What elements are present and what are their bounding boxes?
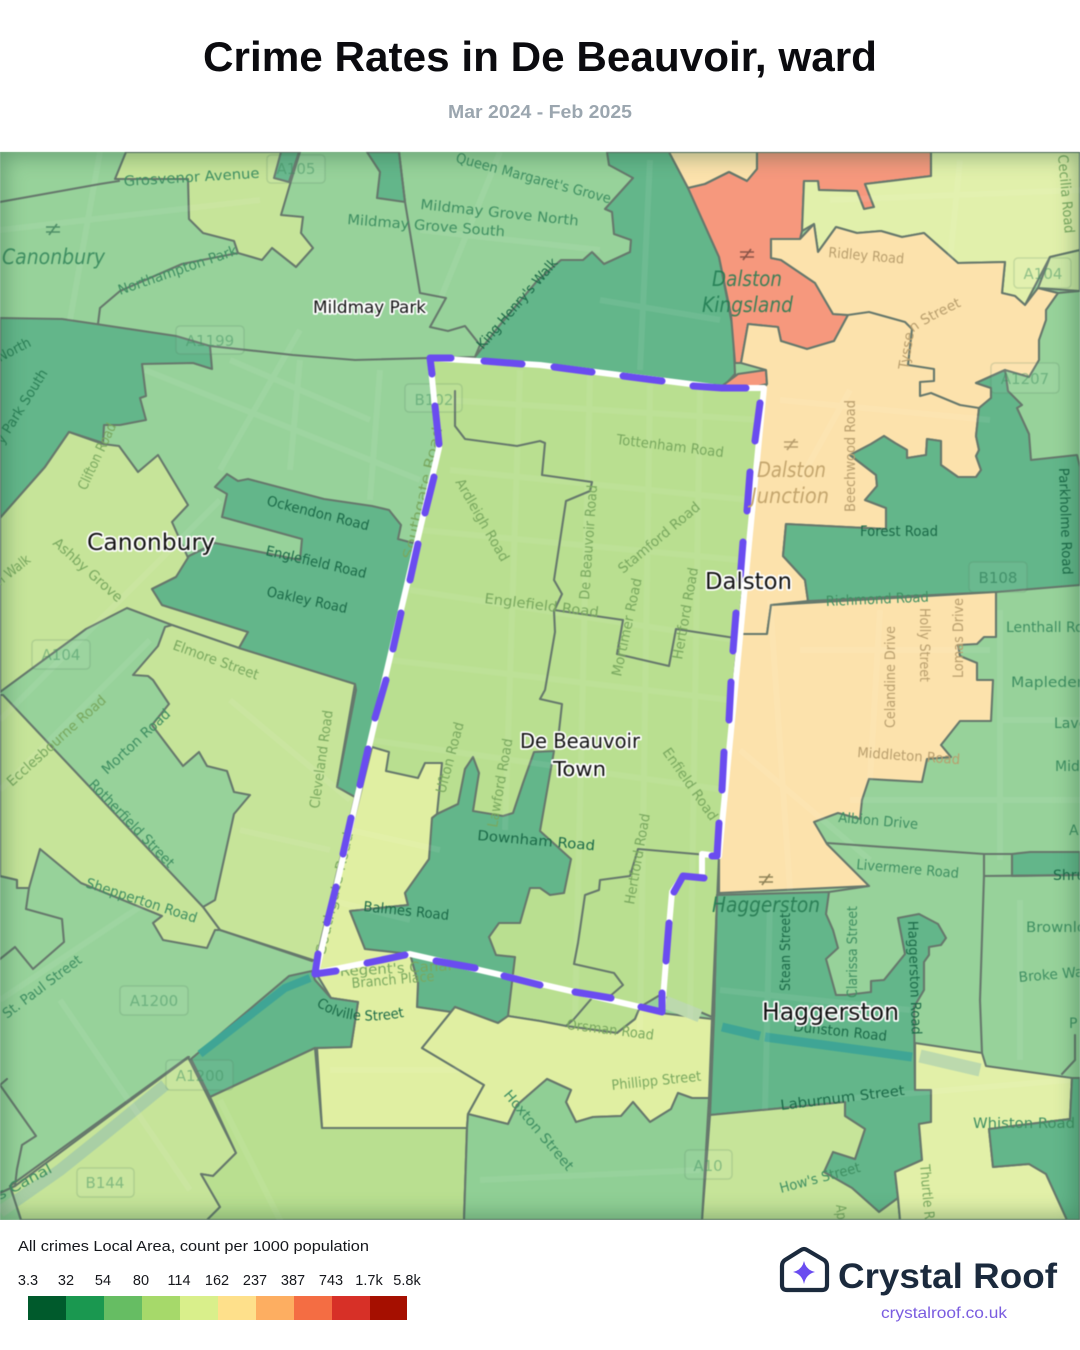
street labels: Oakley Road xyxy=(265,584,349,617)
legend values: 387 xyxy=(281,1273,305,1289)
area: south park xyxy=(201,1048,467,1220)
station labels (italic): Kingsland xyxy=(702,293,794,317)
street labels: Clifton Road xyxy=(75,421,120,493)
place name labels: Mildmay Park xyxy=(313,298,426,318)
street labels: How's Street xyxy=(778,1160,863,1197)
ward boundary: De Beauvoir xyxy=(315,358,764,1012)
area: Grosvenor Avenue xyxy=(115,152,313,267)
station labels (italic) xyxy=(2,245,829,917)
legend xyxy=(18,1239,421,1320)
road shields xyxy=(32,155,1071,1197)
street labels: Grosvenor Avenue xyxy=(123,166,260,190)
area: Shepperton xyxy=(0,695,220,948)
street labels: Elmore Street xyxy=(171,638,261,684)
area: Elmore Street xyxy=(133,625,355,961)
street labels: Beechwood Road xyxy=(843,400,859,512)
area: Colville dark xyxy=(191,971,358,1097)
area: Regent's Canal stripe xyxy=(722,1027,912,1057)
street labels: Hoxton Street xyxy=(500,1087,577,1175)
legend colour scale xyxy=(28,1296,407,1320)
street labels: Orsman Road xyxy=(566,1017,655,1044)
street labels: Stamford Road xyxy=(615,499,704,577)
area: King Henry dark xyxy=(430,152,735,388)
street labels: Clarissa Street xyxy=(845,906,861,998)
street labels: Livermere Road xyxy=(856,857,960,882)
area: ward south-west pale xyxy=(316,747,442,973)
legend values: 1.7k xyxy=(355,1273,383,1289)
area: Haggerston dark xyxy=(710,892,946,1212)
place name labels: De Beauvoir xyxy=(520,729,641,753)
area: canal strip xyxy=(200,978,310,1054)
area: Dalston Junction orange xyxy=(738,224,1058,634)
street labels: Richmond Road xyxy=(825,590,929,610)
station labels (italic): Canonbury xyxy=(2,245,106,269)
area: Ockendon dark xyxy=(152,474,420,797)
street labels: Morton Road xyxy=(99,706,174,778)
street labels xyxy=(0,152,1080,1220)
place name labels xyxy=(87,298,899,1026)
street labels: Regent's Canal xyxy=(339,958,452,980)
place name labels: Town xyxy=(552,757,606,781)
choropleth map xyxy=(0,151,1080,1220)
street labels: Enfield Road xyxy=(659,745,721,824)
legend values: 114 xyxy=(167,1273,191,1289)
street labels: Lawford Road xyxy=(485,737,517,829)
road shields: A1200 xyxy=(130,992,178,1010)
road shields: A10 xyxy=(693,1157,723,1175)
road shields: A1207 xyxy=(1001,370,1049,388)
area: small salmon xyxy=(722,370,767,388)
legend values xyxy=(18,1273,421,1289)
street labels: Hertford Road xyxy=(622,812,654,906)
road shields: A105 xyxy=(277,160,315,178)
street labels: Downham Road xyxy=(477,828,596,854)
street labels: Ardleigh Road xyxy=(452,476,512,565)
legend values: 5.8k xyxy=(393,1273,421,1289)
street labels: Balmes Road xyxy=(363,899,450,924)
area: Middleton orange xyxy=(719,592,996,893)
road shields: B144 xyxy=(86,1174,124,1192)
street labels: King Henry's Walk xyxy=(474,255,562,353)
street labels: Lomas Drive xyxy=(951,598,967,678)
header xyxy=(203,33,877,122)
street labels: A xyxy=(1069,823,1079,839)
road shields: A104 xyxy=(1024,265,1062,283)
street labels: Cecilia Road xyxy=(1054,154,1077,234)
footer xyxy=(0,1220,1080,1350)
station labels (italic): Junction xyxy=(747,484,829,508)
place name labels: Canonbury xyxy=(87,530,215,556)
street labels: Hertford Road xyxy=(670,566,702,661)
website: crystalroof.co.uk xyxy=(881,1305,1008,1322)
legend values: 162 xyxy=(205,1273,229,1289)
street labels: Middleton Road xyxy=(857,745,961,768)
wordmark: Crystal Roof xyxy=(838,1257,1057,1296)
extra boundary lines xyxy=(0,152,1080,1220)
road shields: B108 xyxy=(979,569,1017,587)
place name labels: Haggerston xyxy=(762,998,899,1026)
street labels: Dunston Road xyxy=(793,1019,888,1045)
area: Forest Road dark xyxy=(783,370,1080,601)
street labels: Branch Place xyxy=(351,969,435,992)
street labels: Ecclesbourne Road xyxy=(4,692,110,790)
street labels: Holly Street xyxy=(916,608,932,682)
street labels: Northampton Park xyxy=(116,243,240,299)
street labels: Southgate Road xyxy=(400,426,446,561)
area: A105 dark xyxy=(274,152,299,182)
subtitle: period: Mar 2024 - Feb 2025 xyxy=(448,102,632,122)
station labels (italic): Haggerston xyxy=(712,893,820,917)
legend title: All crimes Local Area, count per 1000 population xyxy=(18,1239,369,1255)
station labels (italic): Dalston xyxy=(712,267,782,291)
legend values: 3.3 xyxy=(18,1273,38,1289)
area: Whiston pale xyxy=(895,1043,1072,1220)
street labels: Celandine Drive xyxy=(883,626,899,728)
road shields: A1200 xyxy=(176,1067,224,1085)
station labels (italic): Dalston xyxy=(757,458,826,482)
street labels: Laburnum Street xyxy=(780,1083,906,1114)
street labels: Colville Street xyxy=(318,998,404,1022)
street labels: Englefield Road xyxy=(264,543,368,582)
street labels: P xyxy=(1069,1016,1077,1032)
street labels: Queen Margaret's Grove xyxy=(454,152,613,207)
street labels: Haggerston Road xyxy=(904,921,924,1035)
area: inner boundary Tyssen xyxy=(848,312,979,408)
street labels: Tyssen Street xyxy=(898,298,962,369)
street labels: Albion Drive xyxy=(838,810,919,833)
road shields: B102 xyxy=(415,391,453,409)
area: south-west lime xyxy=(10,1057,236,1220)
area: north dark xyxy=(367,152,405,202)
area: A104 lime xyxy=(1038,250,1080,291)
place name labels: Dalston xyxy=(705,569,792,595)
road shields: A1199 xyxy=(186,332,234,350)
street labels: St. Paul Street xyxy=(0,952,86,1022)
road shields: A104 xyxy=(42,646,80,664)
legend values: 80 xyxy=(133,1273,149,1289)
title: Crime Rates in De Beauvoir, ward xyxy=(203,33,877,80)
street labels: Rotherfield Street xyxy=(85,777,178,872)
logo: Crystal Roof xyxy=(780,1246,1058,1322)
street labels: Southgate Road xyxy=(313,831,357,956)
street labels: Englefield Road xyxy=(484,591,600,621)
area: south-east dark xyxy=(989,1078,1080,1220)
area: Orsman pale xyxy=(422,1007,712,1124)
street labels: Mildmay Grove South xyxy=(347,212,505,240)
rail station icons xyxy=(46,224,798,885)
street labels: Tottenham Road xyxy=(615,432,725,461)
area: Hoxton mid xyxy=(464,1079,709,1220)
street labels: Stean Street xyxy=(778,913,794,991)
street labels: Whiston Road xyxy=(973,1116,1075,1132)
street labels: Mortimer Road xyxy=(609,577,646,678)
area: Dalston Kingsland salmon xyxy=(688,152,931,363)
area: north-east pale lime xyxy=(802,152,1080,305)
street labels: Cleveland Road xyxy=(307,709,337,810)
area: Canonbury xyxy=(0,432,248,692)
area: top orange xyxy=(669,152,757,188)
legend values: 237 xyxy=(243,1273,267,1289)
street labels: Ockendon Road xyxy=(265,493,371,534)
street labels: Mid xyxy=(1055,759,1080,775)
area: Branch Place pale xyxy=(316,954,484,1128)
area: Downham dark xyxy=(350,751,571,1023)
icon: house with star xyxy=(782,1249,827,1290)
legend values: 54 xyxy=(95,1273,111,1289)
street labels: Mildmay Grove North xyxy=(420,197,579,230)
legend values: 32 xyxy=(58,1273,74,1289)
street labels: Parkholme Road xyxy=(1055,468,1075,575)
ward areas xyxy=(0,152,1080,1220)
street labels: Shepperton Road xyxy=(84,876,199,927)
street labels: Phillipp Street xyxy=(611,1069,702,1094)
area: Shrubland dark xyxy=(1012,852,1080,876)
street labels: De Beauvoir Road xyxy=(577,484,601,600)
area: How's Street lime xyxy=(702,1102,900,1220)
street labels: Forest Road xyxy=(860,524,938,540)
street labels: Ashby Grove xyxy=(49,535,125,606)
area: De Beauvoir ward base xyxy=(316,358,764,1033)
street labels: Ufton Road xyxy=(433,720,468,795)
area: New River dark xyxy=(0,318,212,518)
legend values: 743 xyxy=(319,1273,343,1289)
street labels: Ridley Road xyxy=(828,245,905,268)
